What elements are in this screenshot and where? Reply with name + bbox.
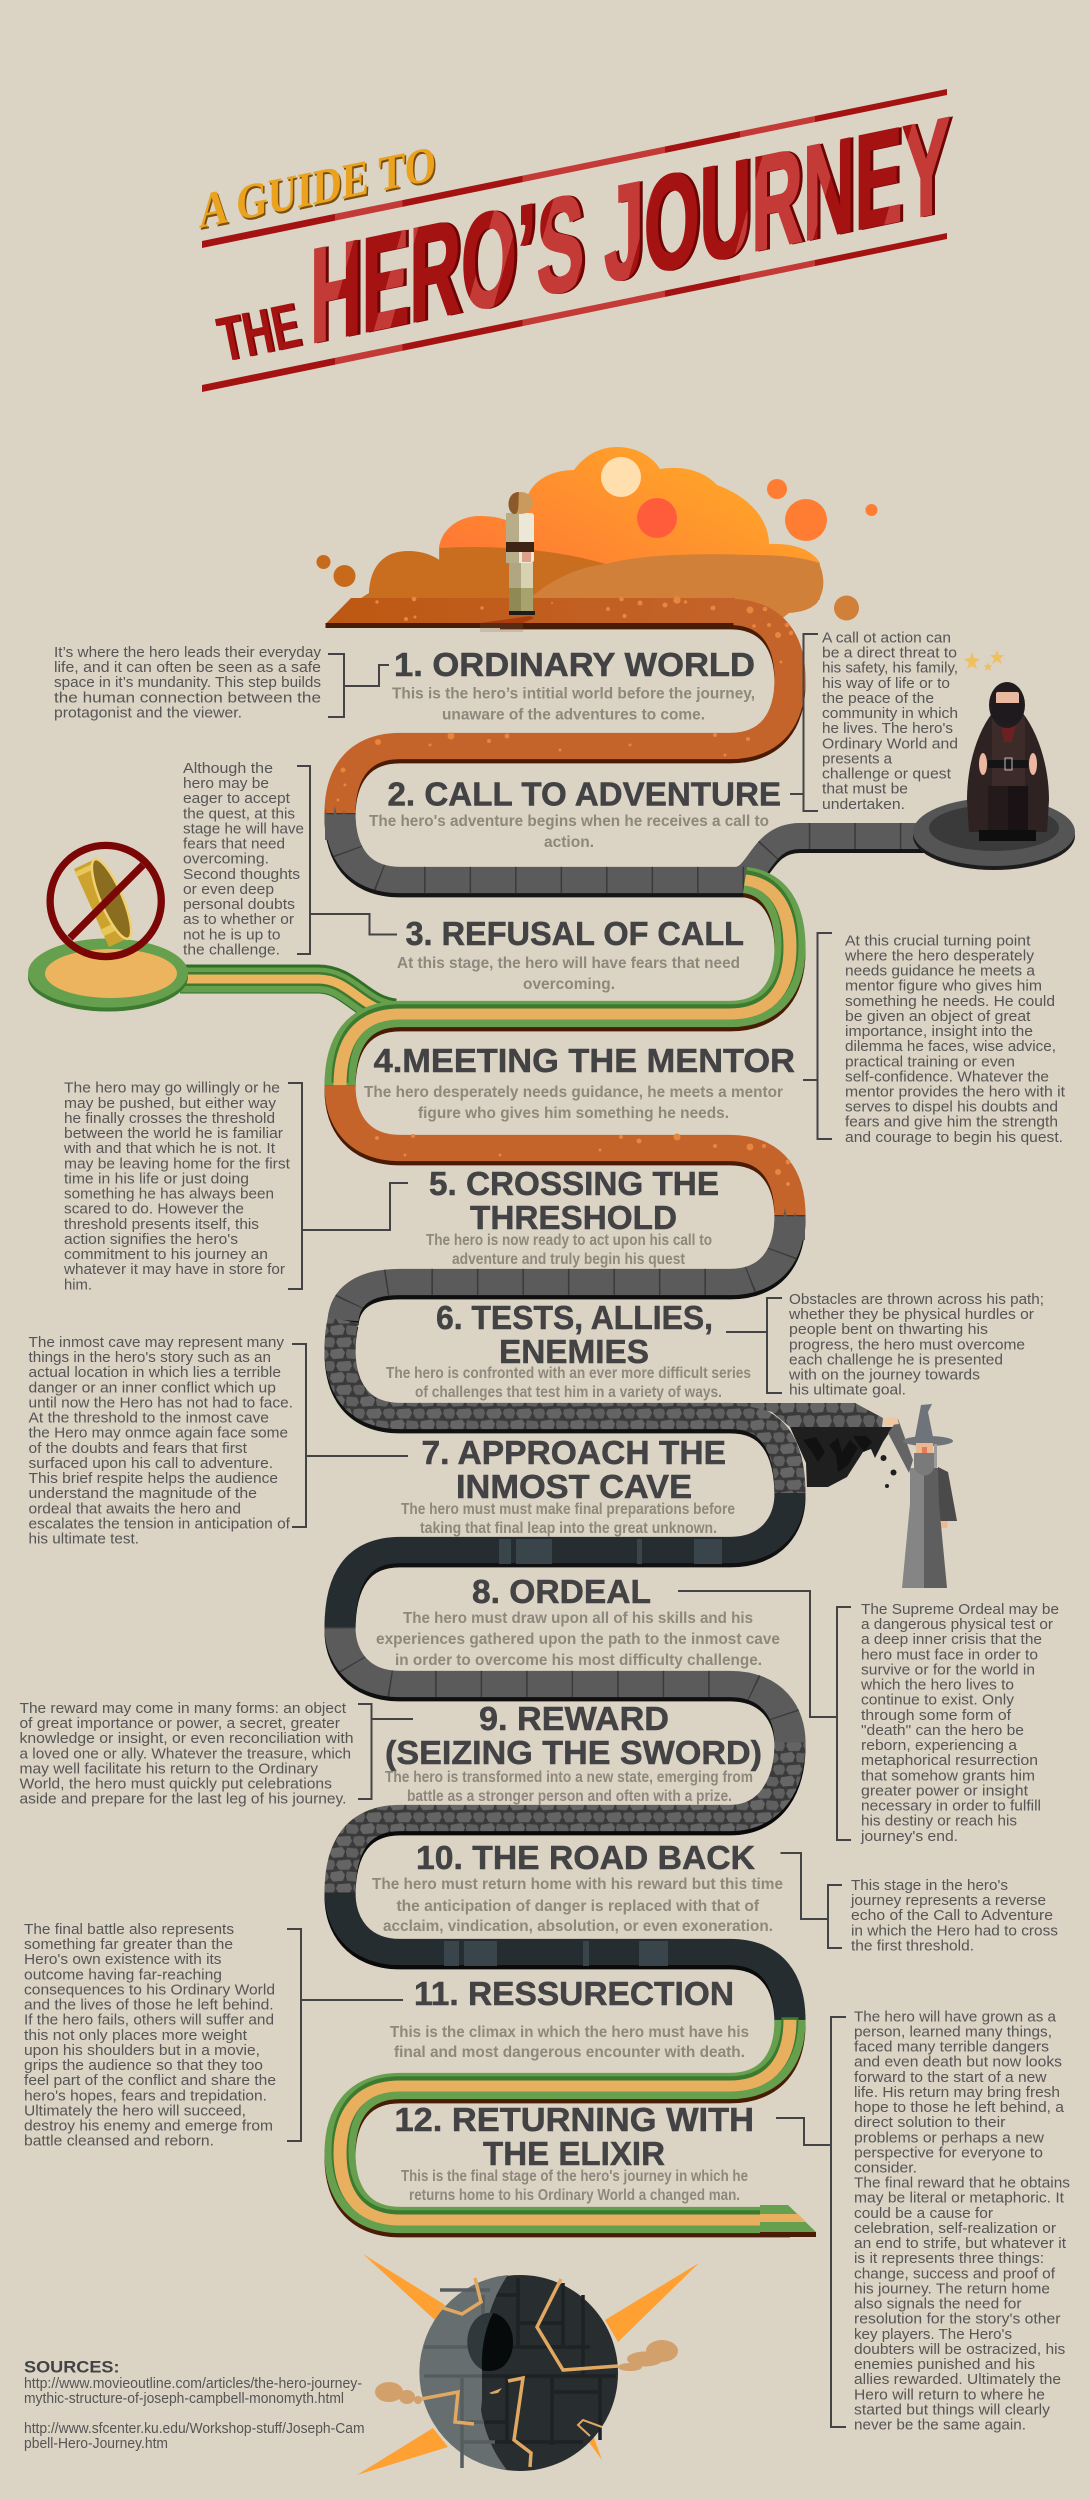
illustration: desert landscape with two suns: [316, 447, 878, 620]
step 9 description: [20, 1701, 354, 1808]
step 6 heading: Tests, Allies, Enemies: The hero is confronted with an ever more difficult series: [386, 1365, 751, 1382]
step 12 description: may be literal or metaphoric. It: [854, 2191, 1064, 2207]
dark bands on road: [444, 1539, 722, 1966]
step 5 heading: Crossing the Threshold: THRESHOLD: [470, 1199, 677, 1236]
sun: red: [637, 498, 677, 538]
step 11 description: hero's hopes, fears and trepidation.: [24, 2088, 267, 2104]
step 7 description: danger or an inner conflict which up: [28, 1380, 276, 1396]
face and beard: [916, 1443, 933, 1455]
step 12 description: celebration, self-realization or: [854, 2221, 1056, 2237]
step 5 description: between the world he is familiar: [64, 1126, 283, 1142]
step 5 description: may be leaving home for the first: [64, 1156, 290, 1172]
step 4 heading: Meeting the Mentor: figure who gives him something he needs.: [418, 1105, 729, 1122]
road: stone 3: [340, 1627, 790, 1743]
title: The: THE: [214, 290, 308, 376]
step 11 description: upon his shoulders but in a movie,: [24, 2043, 260, 2059]
step 12 description: and even death but now looks: [854, 2055, 1062, 2071]
step 3 description: as to whether or: [183, 912, 294, 928]
connector: step 1: [328, 654, 389, 717]
step 3 description: overcoming.: [183, 852, 269, 868]
step 4 description: importance, insight into the: [845, 1024, 1033, 1040]
step 8 description: metaphorical resurrection: [861, 1753, 1038, 1769]
step 7 heading: Approach the Inmost Cave: INMOST CAVE: [456, 1468, 692, 1505]
step 7 heading: Approach the Inmost Cave: taking that final leap into the great unknown.: [420, 1520, 717, 1537]
step 6 description: progress, the hero must overcome: [789, 1337, 1025, 1353]
step 12 heading: Returning with the Elixir: THE ELIXIR: [483, 2135, 665, 2172]
step 5 description: The hero may go willingly or he: [64, 1081, 280, 1097]
cape: [938, 1467, 957, 1521]
step 12 description: [854, 2009, 1070, 2434]
step 12 description: could be a cause for: [854, 2206, 993, 2222]
step 9 description: may well facilitate his return to the Ordinary: [20, 1762, 319, 1778]
step 4 description: needs guidance he meets a: [845, 963, 1036, 979]
road: stone 2: [343, 1215, 790, 1320]
step 11 description: outcome having far-reaching: [24, 1967, 222, 1983]
step 1 description: life, and it can often be seen as a safe: [54, 660, 321, 676]
step 10 heading: The Road Back: The hero must return home with his reward but this time: [372, 1876, 783, 1893]
step 5 description: threshold presents itself, this: [64, 1217, 259, 1233]
step 5 description: time in his life or just doing: [64, 1171, 249, 1187]
step 7 description: The inmost cave may represent many: [28, 1335, 285, 1351]
connector: step 3: [297, 766, 397, 954]
step 8 heading: Ordeal: experiences gathered upon the path to the inmost cave: [376, 1631, 780, 1648]
step 11 description: consequences to his Ordinary World: [24, 1982, 275, 1998]
connector: step 2: [790, 634, 818, 811]
step 8 description: "death" can the hero be: [861, 1723, 1024, 1739]
icon: wizard figure: [883, 1404, 957, 1588]
step 4 heading: Meeting the Mentor: The hero desperately needs guidance, he meets a mentor: [364, 1084, 783, 1101]
step 4 heading: Meeting the Mentor: [364, 1042, 795, 1122]
step 10 heading: The Road Back: 10. THE ROAD BACK: [416, 1839, 755, 1876]
raised arm: [888, 1419, 913, 1473]
step 6 description: with on the journey towards: [788, 1368, 980, 1384]
connector: step 11: [287, 1929, 403, 2141]
step 8 description: continue to exist. Only: [861, 1693, 1015, 1709]
rays of light: [357, 2254, 699, 2475]
step 1 heading: Ordinary World: This is the hero’s intitial world before the journey,: [392, 686, 755, 702]
road: green and gold 1: [340, 877, 790, 1085]
step 12 heading: Returning with the Elixir: returns home to his Ordinary World a changed man.: [409, 2187, 740, 2204]
step 6 description: his ultimate goal.: [789, 1383, 906, 1399]
step 3 description: stage he will have: [183, 822, 304, 838]
step 8 description: a deep inner crisis that the: [861, 1632, 1042, 1648]
connector: step 6: [726, 1298, 782, 1393]
step 12 description: also signals the need for: [854, 2297, 1022, 2313]
step 7 description: things in the hero's story such as an: [28, 1350, 271, 1366]
step 7 description: until now the Hero has not had to face.: [28, 1396, 293, 1412]
step 11 description: this not only places more weight: [24, 2028, 247, 2044]
step 3 description: hero may be: [183, 776, 269, 792]
step 11 heading: Ressurection: final and most dangerous encounter with death.: [394, 2044, 745, 2061]
platform: green and gold ring: [28, 938, 188, 1012]
jagged transitions: [325, 806, 805, 1240]
road: stone 1: [340, 813, 745, 880]
road edge shadow: [340, 616, 790, 2224]
step 5 description: something he has always been: [64, 1186, 274, 1202]
crack fragment: [489, 2388, 502, 2394]
step 12 description: perspective for everyone to: [854, 2145, 1043, 2161]
step 7 description: understand the magnitude of the: [28, 1486, 257, 1502]
step 8 description: [860, 1602, 1059, 1845]
step 8 description: necessary in order to fulfill: [861, 1799, 1041, 1815]
step 12 heading: Returning with the Elixir: [394, 2101, 754, 2204]
sources: mythic-structure-of-joseph-campbell-monomyth.html: [24, 2391, 344, 2407]
panel lines: [424, 2278, 616, 2445]
sources: http://www.movieoutline.com/articles/the-hero-journey-: [24, 2376, 362, 2392]
step 5 description: with and that which he is not. It: [63, 1141, 275, 1157]
step 10 heading: The Road Back: the anticipation of danger is replaced with that of: [396, 1898, 760, 1915]
step 11 heading: Ressurection: [390, 1975, 749, 2061]
step 11 heading: Ressurection: 11. RESSURECTION: [414, 1975, 734, 2012]
step 9 description: knowledge or insight, or even reconciliation with: [20, 1731, 354, 1747]
step 4 description: practical training or even: [845, 1054, 1015, 1070]
step 2 heading: Call to Adventure: action.: [544, 834, 594, 851]
step 7 description: ordeal that awaits the hero and: [28, 1501, 241, 1517]
step 7 heading: Approach the Inmost Cave: [401, 1434, 735, 1537]
step 8 description: that somehow grants him: [861, 1768, 1035, 1784]
step 5 description: him.: [64, 1277, 92, 1293]
step 11 description: battle cleansed and reborn.: [24, 2134, 214, 2150]
step 11 description: If the hero fails, others will suffer and: [24, 2013, 274, 2029]
light dune: [528, 554, 823, 620]
step 3 heading: Refusal of Call: 3. REFUSAL OF CALL: [406, 915, 744, 952]
step 12 description: direct solution to their: [854, 2115, 1006, 2131]
step 12 description: key players. The Hero's: [854, 2327, 1012, 2343]
step 5 heading: Crossing the Threshold: The hero is now ready to act upon his call to: [426, 1232, 712, 1249]
step 4 description: be given an object of great: [845, 1009, 1030, 1025]
step 4 description: fears and give him the strength: [845, 1115, 1058, 1131]
step 10 description: echo of the Call to Adventure: [851, 1908, 1053, 1924]
step 8 description: reborn, experiencing a: [861, 1738, 1018, 1754]
icon: bearded giant mentor: [967, 682, 1049, 841]
step 11 description: Hero's own existence with its: [24, 1952, 222, 1968]
step 4 description: dilemma he faces, wise advice,: [845, 1039, 1056, 1055]
step 5 description: commitment to his journey an: [64, 1247, 268, 1263]
step 2 description: that must be: [822, 782, 908, 798]
step 12 description: is it represents three things:: [854, 2251, 1044, 2267]
road: dark 2: [340, 1893, 790, 2020]
step 7 description: This brief respite helps the audience: [28, 1471, 278, 1487]
step 7 description: At the threshold to the inmost cave: [28, 1411, 269, 1427]
step 3 description: fears that need: [183, 837, 285, 853]
step 3 description: the challenge.: [183, 942, 280, 958]
step 4 description: something he needs. He could: [845, 994, 1055, 1010]
step 9 heading: Reward: battle as a stronger person and often with a prize.: [407, 1788, 732, 1805]
step 4 description: and courage to begin his quest.: [845, 1130, 1063, 1146]
step 9 heading: Reward: The hero is transformed into a new state, emerging from: [385, 1769, 753, 1786]
step 11 description: [24, 1922, 276, 2150]
step 5 description: [63, 1081, 290, 1293]
step 12 description: The final reward that he obtains: [854, 2176, 1070, 2192]
cracks: [421, 2278, 618, 2467]
title: Hero's Journey: [310, 88, 953, 372]
step 9 description: of great importance or power, a secret, greater: [20, 1716, 340, 1732]
road surface segments: [340, 612, 790, 2224]
step 3 description: or even deep: [183, 882, 274, 898]
icon: forbidden golden ring: [50, 845, 161, 957]
step 7 heading: Approach the Inmost Cave: 7. APPROACH THE: [422, 1434, 726, 1471]
step 12 description: never be the same again.: [854, 2418, 1026, 2434]
step 7 description: the Hero may onmce again face some: [28, 1426, 288, 1442]
step 5 heading: Crossing the Threshold: [426, 1165, 719, 1268]
step 2 description: be a direct threat to: [822, 646, 957, 662]
step 1 description: protagonist and the viewer.: [54, 706, 242, 722]
step 2 description: A call ot action can: [822, 630, 951, 646]
sources: pbell-Hero-Journey.htm: [24, 2436, 168, 2452]
step 6 description: Obstacles are thrown across his path;: [789, 1292, 1044, 1308]
superlaser dish: [467, 2313, 513, 2371]
step 8 heading: Ordeal: in order to overcome his most difficulty challenge.: [395, 1652, 762, 1669]
step 9 description: World, the hero must quickly put celebrations: [20, 1777, 332, 1793]
connector: step 12: [776, 2017, 846, 2427]
step 8 description: his destiny or reach his: [861, 1814, 1017, 1830]
step 2 description: he lives. The hero's: [822, 721, 953, 737]
step 12 description: problems or perhaps a new: [854, 2130, 1045, 2146]
step 7 description: his ultimate test.: [28, 1532, 139, 1548]
connector: step 10: [780, 1853, 842, 1948]
connector: step 9: [358, 1704, 413, 1799]
floating dots: [316, 479, 878, 620]
branch road to Hagrid's platform: [735, 836, 930, 884]
step 4 description: mentor figure who gives him: [845, 979, 1042, 995]
step 12 description: person, learned many things,: [854, 2024, 1052, 2040]
road: orange sand 1: [340, 612, 790, 813]
step 12 description: started but things will clearly: [854, 2402, 1051, 2418]
step 9 heading: Reward: 9. REWARD: [479, 1700, 669, 1737]
dark dune: [358, 547, 606, 600]
step 11 description: The final battle also represents: [24, 1922, 234, 1938]
step 10 description: in which the Hero had to cross: [851, 1923, 1058, 1939]
title: A Guide To: A GUIDE TO: [200, 137, 438, 241]
step 5 description: scared to do. However the: [64, 1202, 244, 1218]
smoke puffs: [375, 2340, 678, 2404]
step 11 description: feel part of the conflict and share the: [24, 2073, 276, 2089]
step 6 description: [788, 1292, 1044, 1399]
step 2 heading: Call to Adventure: [369, 776, 781, 851]
step 9 description: The reward may come in many forms: an object: [20, 1701, 346, 1717]
step 8 description: through some form of: [861, 1708, 1012, 1724]
step 8 description: greater power or insight: [861, 1783, 1028, 1799]
sources: SOURCES:: [24, 2358, 120, 2376]
step 7 description: surfaced upon his call to adventure.: [28, 1456, 273, 1472]
green branch road to the ring platform: [180, 979, 395, 1014]
sphere: [422, 2275, 618, 2471]
step 6 description: people bent on thwarting his: [789, 1322, 988, 1338]
step 7 description: escalates the tension in anticipation of: [28, 1516, 291, 1532]
step 9 heading: Reward: (SEIZING THE SWORD): [385, 1734, 762, 1771]
step 12 heading: Returning with the Elixir: 12. RETURNING WITH: [394, 2101, 754, 2138]
step 5 description: he finally crosses the threshold: [64, 1111, 275, 1127]
step 8 description: a dangerous physical test or: [861, 1617, 1053, 1633]
connector: step 5: [288, 1083, 408, 1289]
step 6 heading: Tests, Allies, Enemies: ENEMIES: [499, 1333, 649, 1370]
step 2 description: his way of life or to: [822, 676, 950, 692]
orange cloud sky: [439, 447, 820, 600]
step 4 description: serves to dispel his doubts and: [845, 1100, 1058, 1116]
step 3 description: the quest, at this: [183, 806, 295, 822]
step 8 heading: Ordeal: 8. ORDEAL: [472, 1573, 651, 1610]
road: the winding hero's path: [180, 596, 930, 2237]
step 1 description: [54, 645, 322, 722]
connector: step 8: [678, 1591, 851, 1840]
step 2 description: the peace of the: [822, 691, 934, 707]
step 12 description: consider.: [854, 2161, 917, 2177]
platform: Hagrid's stone disc: [913, 798, 1075, 870]
step 7 description: actual location in which lies a terrible: [28, 1365, 281, 1381]
step 4 description: where the hero desperately: [844, 948, 1035, 964]
step 2 description: community in which: [822, 706, 958, 722]
step 3 heading: Refusal of Call: [397, 915, 744, 993]
step 3 description: [183, 761, 304, 958]
step 9 description: aside and prepare for the last leg of his journey.: [20, 1792, 346, 1808]
step 4 heading: Meeting the Mentor: 4.MEETING THE MENTOR: [374, 1042, 795, 1079]
title: A Guide To: A GUIDE TO: [199, 135, 436, 239]
step 12 description: an end to strife, but whatever it: [854, 2236, 1066, 2252]
step 10 description: This stage in the hero's: [851, 1878, 1008, 1894]
icon: dizzy stars: [964, 650, 1004, 671]
step 4 description: mentor provides the hero with it: [845, 1084, 1065, 1100]
sources: [24, 2358, 364, 2452]
step 5 description: action signifies the hero's: [64, 1232, 238, 1248]
step 2 description: undertaken.: [822, 797, 905, 813]
step 9 description: a loved one or ally. Whatever the treasure, which: [20, 1746, 351, 1762]
connector: step 7: [292, 1344, 408, 1527]
step 1 heading: Ordinary World: [392, 646, 755, 724]
crumbled road and rocks: [735, 1403, 896, 1488]
step 12 description: resolution for the story's other: [854, 2312, 1061, 2328]
step 6 description: whether they be physical hurdles or: [788, 1307, 1034, 1323]
step 6 description: each challenge he is presented: [789, 1352, 1003, 1368]
step 8 heading: Ordeal: The hero must draw upon all of his skills and his: [403, 1610, 753, 1627]
step 12 description: hope to those he left behind, a: [854, 2100, 1065, 2116]
step 6 heading: Tests, Allies, Enemies: [386, 1299, 751, 1401]
step 10 description: journey represents a reverse: [850, 1893, 1046, 1909]
sun: pale: [601, 457, 641, 497]
road: green and gold 2: [340, 2017, 790, 2220]
illustration: exploding death star: [357, 2254, 699, 2475]
lit side panel lines: [424, 2290, 495, 2468]
title: The: THE: [212, 290, 306, 376]
step 8 description: survive or for the world in: [861, 1662, 1035, 1678]
step 10 heading: The Road Back: [372, 1839, 783, 1935]
step 2 description: challenge or quest: [822, 767, 951, 783]
step 4 description: self-confidence. Whatever the: [845, 1069, 1049, 1085]
step 8 description: journey's end.: [860, 1829, 958, 1845]
step 10 description: [850, 1878, 1058, 1954]
step 1 description: the human connection between the: [54, 690, 321, 706]
step 12 description: life. His return may bring fresh: [854, 2085, 1060, 2101]
step 2 description: presents a: [822, 752, 893, 768]
step 11 description: something far greater than the: [24, 1937, 233, 1953]
step 7 description: [28, 1335, 293, 1548]
road: cobble 2: [340, 1743, 790, 1893]
hat: [915, 1404, 933, 1437]
step 6 heading: Tests, Allies, Enemies: 6. TESTS, ALLIES,: [436, 1299, 713, 1336]
sand speckles: [336, 732, 790, 1186]
step 8 description: The Supreme Ordeal may be: [861, 1602, 1059, 1618]
lit side: [419, 2275, 508, 2470]
step 3 description: Although the: [183, 761, 273, 777]
step 1 heading: Ordinary World: 1. ORDINARY WORLD: [394, 646, 755, 683]
step 7 description: of the doubts and fears that first: [28, 1441, 247, 1457]
step 2 heading: Call to Adventure: The hero's adventure begins when he receives a call to: [369, 813, 769, 830]
step 12 description: doubters will be ostracized, his: [854, 2342, 1065, 2358]
sources: http://www.sfcenter.ku.edu/Workshop-stuff/Joseph-Cam: [24, 2421, 364, 2437]
step 12 description: The hero will have grown as a: [854, 2009, 1057, 2025]
step 8 description: which the hero lives to: [860, 1678, 1014, 1694]
step 8 heading: Ordeal: [376, 1573, 780, 1669]
step 2 heading: Call to Adventure: 2. CALL TO ADVENTURE: [388, 776, 781, 812]
step 1 heading: Ordinary World: unaware of the adventures to come.: [442, 706, 705, 724]
step 2 description: [822, 630, 958, 813]
step 9 heading: Reward: [385, 1700, 762, 1805]
step 12 description: allies rewarded. Ultimately the: [854, 2372, 1061, 2388]
step 5 heading: Crossing the Threshold: 5. CROSSING THE: [429, 1165, 719, 1202]
step 3 description: eager to accept: [183, 791, 290, 807]
step 6 heading: Tests, Allies, Enemies: of challenges that test him in a variety of ways.: [415, 1384, 722, 1401]
step 11 description: Ultimately the hero will succeed,: [24, 2103, 246, 2119]
step 4 description: At this crucial turning point: [845, 933, 1030, 949]
step 2 description: his safety, his family,: [822, 661, 958, 677]
step 12 description: enemies punished and his: [854, 2357, 1035, 2373]
step 3 description: Second thoughts: [183, 867, 300, 883]
step 10 description: the first threshold.: [851, 1938, 974, 1954]
step 12 description: faced many terrible dangers: [854, 2040, 1049, 2056]
step 1 description: space in it’s mundanity. This step builds: [54, 675, 321, 691]
road: cobble 1: [340, 1320, 790, 1493]
step 12 description: Hero will return to where he: [854, 2387, 1045, 2403]
rule above main title: [202, 89, 947, 248]
step 5 heading: Crossing the Threshold: adventure and truly begin his quest: [452, 1251, 685, 1268]
step 10 heading: The Road Back: acclaim, vindication, absolution, or even exoneration.: [383, 1918, 773, 1935]
road: dark 1: [340, 1493, 790, 1627]
road end step: [760, 2205, 816, 2237]
step 12 heading: Returning with the Elixir: This is the final stage of the hero's journey in which he: [401, 2168, 748, 2185]
step 3 heading: Refusal of Call: At this stage, the hero will have fears that need: [397, 955, 740, 972]
starting platform: [326, 596, 793, 664]
step 11 description: and the lives of those he left behind.: [24, 1998, 274, 2014]
step 3 description: personal doubts: [183, 897, 295, 913]
step 3 description: not he is up to: [183, 927, 280, 943]
icon: hero figure: [480, 492, 535, 632]
title: A Guide to the Hero's Journey: [199, 88, 953, 392]
step 3 heading: Refusal of Call: overcoming.: [523, 976, 615, 993]
road: orange sand 2: [340, 1085, 790, 1215]
step 1 description: It’s where the hero leads their everyday: [54, 645, 322, 661]
robe: [902, 1468, 924, 1588]
step 11 description: grips the audience so that they too: [24, 2058, 263, 2074]
rule below main title: [202, 233, 947, 392]
step 5 description: whatever it may have in store for: [63, 1262, 285, 1278]
step 4 description: [844, 933, 1065, 1146]
step 12 description: his journey. The return home: [854, 2282, 1050, 2298]
step 7 heading: Approach the Inmost Cave: The hero must must make final preparations before: [401, 1501, 735, 1518]
connector: step 4: [803, 933, 832, 1139]
step 8 description: hero must face in order to: [861, 1647, 1038, 1663]
step 2 description: Ordinary World and: [822, 736, 958, 752]
step 12 description: change, success and proof of: [854, 2266, 1056, 2282]
step 12 description: forward to the start of a new: [854, 2070, 1047, 2086]
title: The: [212, 290, 308, 376]
step 5 description: may be pushed, but either way: [64, 1096, 277, 1112]
step 11 heading: Ressurection: This is the climax in which the hero must have his: [390, 2024, 749, 2041]
step 11 description: destroy his enemy and emerge from: [24, 2119, 273, 2135]
